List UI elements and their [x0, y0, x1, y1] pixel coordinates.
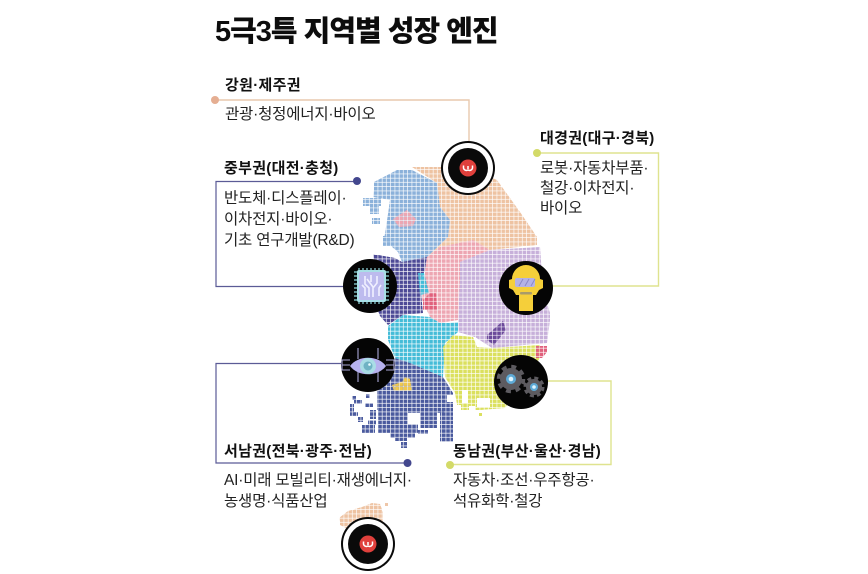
text block: Dongnam — [453, 443, 601, 510]
text block: Gangwon-Jeju — [225, 77, 376, 123]
region: Chungnam — [373, 254, 427, 325]
list: Dongnam industries: 자동차·조선·우주항공· — [453, 472, 594, 489]
south coast erosion — [447, 390, 490, 410]
dot-grid map of Korea — [350, 167, 550, 448]
region: Jeju dots — [339, 503, 388, 530]
list: Gangwon-Jeju industries: 관광·청정에너지·바이오 — [225, 106, 376, 123]
text block: Daegyeong — [540, 130, 655, 217]
list: Seonam industries — [224, 472, 412, 510]
connector: Daegyeong — [533, 149, 658, 286]
heading: Gangwon-Jeju: 강원·제주권 — [225, 77, 301, 94]
text block: Jungbu — [224, 160, 355, 249]
region: Gyeongnam lime — [443, 335, 540, 410]
region: Gyeongbuk north pink — [422, 240, 490, 323]
icon: chip — [343, 259, 397, 313]
icon: eye with circuit — [341, 338, 395, 392]
region: cyan spot — [418, 273, 429, 295]
region: Chungbuk and Daejeon area — [373, 170, 450, 262]
heading: Jungbu: 중부권(대전·충청) — [224, 160, 339, 177]
list: Seonam industries: 농생명·식품산업 — [224, 493, 327, 510]
connector: Gangwon-Jeju — [211, 96, 469, 146]
region: Jeonbuk cyan — [388, 315, 458, 377]
list: Jungbu industries: 반도체·디스플레이· — [224, 190, 346, 207]
connector: Dongnam — [446, 381, 611, 469]
icon: Gangwon disc — [441, 141, 495, 195]
list: Seonam industries: AI·미래 모빌리티·재생에너지· — [224, 472, 412, 489]
connector: Seonam — [216, 364, 412, 467]
list: Daegyeong industries — [540, 160, 648, 217]
heading: Dongnam: 동남권(부산·울산·경남) — [453, 443, 601, 460]
list: Dongnam industries — [453, 472, 594, 510]
list: Daegyeong industries: 철강·이차전지· — [540, 180, 634, 197]
icon: yellow helmet worker — [499, 261, 553, 315]
icon: gears — [494, 355, 548, 409]
text block: Seonam — [224, 443, 412, 510]
region: Gwangju gold spot — [392, 377, 412, 391]
region: purple spot — [487, 321, 506, 345]
heading: Daegyeong: 대경권(대구·경북) — [540, 130, 655, 147]
list: Dongnam industries: 석유화학·철강 — [453, 493, 542, 510]
region: Daegyeong lilac — [458, 247, 550, 348]
list: Jungbu industries — [224, 190, 355, 249]
title: 5극3특 지역별 성장 엔진 — [215, 16, 498, 48]
region: red spot — [423, 293, 437, 310]
region: northwest islands — [363, 198, 391, 246]
list: Daegyeong industries: 로봇·자동차부품· — [540, 160, 648, 177]
list: Daegyeong industries: 바이오 — [540, 200, 582, 217]
list: Jungbu industries: 이차전지·바이오· — [224, 211, 332, 228]
region: Ulsan red spot — [536, 346, 547, 358]
region: Jeonnam navy — [350, 358, 453, 448]
heading: Seonam: 서남권(전북·광주·전남) — [224, 443, 372, 460]
list: Jungbu industries: 기초 연구개발(R&D) — [224, 232, 355, 249]
icon: Jeju disc — [341, 517, 395, 571]
connector: Jungbu — [216, 177, 361, 286]
small dot — [479, 413, 482, 416]
region: Sejong spot — [393, 210, 416, 227]
region: Gangwon — [412, 167, 537, 257]
